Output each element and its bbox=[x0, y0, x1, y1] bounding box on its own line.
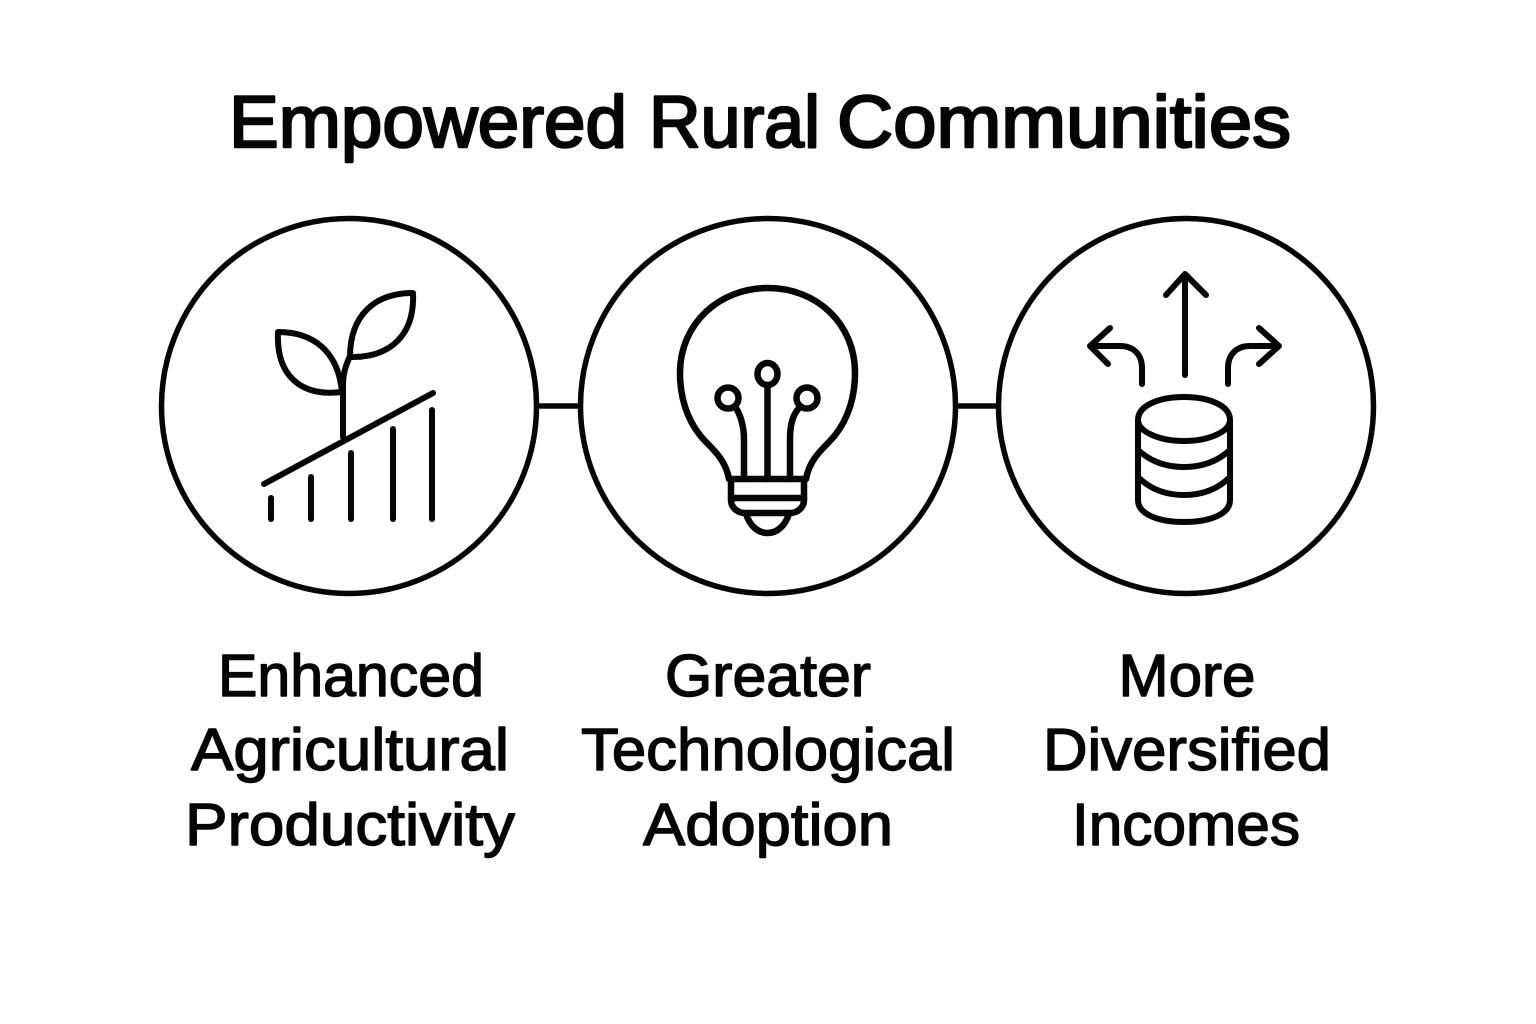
title bbox=[229, 82, 1291, 163]
label: agricultural productivity bbox=[185, 643, 516, 858]
icon: coin stack with three arrows bbox=[1090, 274, 1279, 522]
icon: light bulb with circuit bbox=[680, 288, 855, 533]
title: Communities bbox=[837, 82, 1291, 163]
title: Empowered bbox=[229, 82, 627, 163]
title: Rural bbox=[649, 82, 820, 163]
label: agricultural productivity: Agricultural bbox=[191, 717, 509, 783]
label: technological adoption: Technological bbox=[581, 717, 955, 783]
icon: sprout and rising bars bbox=[264, 293, 433, 519]
label: diversified incomes bbox=[1043, 643, 1331, 858]
label: diversified incomes: Diversified bbox=[1043, 717, 1331, 783]
panel circle: technology bbox=[580, 218, 956, 594]
panel circle: incomes bbox=[998, 218, 1374, 594]
connectors between circles bbox=[537, 403, 998, 409]
label: technological adoption: Greater bbox=[665, 643, 871, 709]
label: agricultural productivity: Productivity bbox=[185, 792, 516, 858]
panel circle: agriculture bbox=[162, 218, 536, 594]
label: technological adoption bbox=[581, 643, 955, 858]
label: agricultural productivity: Enhanced bbox=[218, 643, 484, 709]
label: diversified incomes: More bbox=[1118, 643, 1256, 709]
label: diversified incomes: Incomes bbox=[1072, 792, 1300, 858]
label: technological adoption: Adoption bbox=[643, 792, 893, 858]
